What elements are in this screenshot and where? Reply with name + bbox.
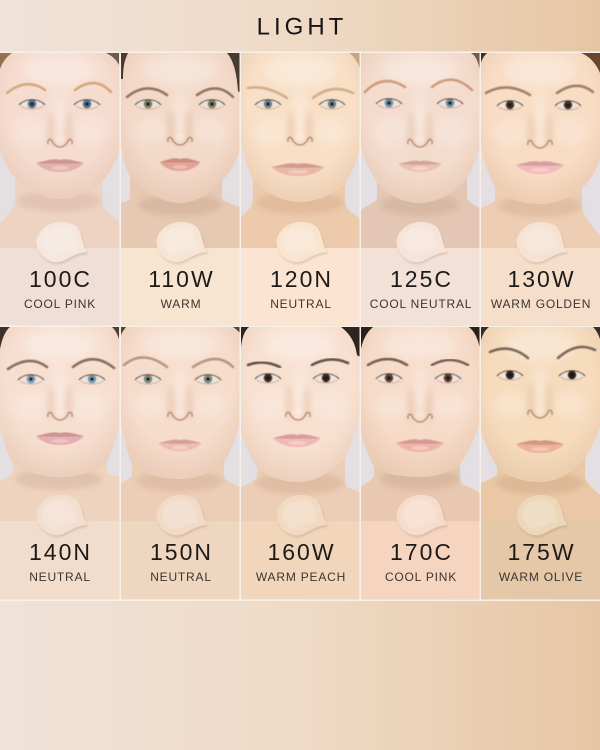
tile: 110W warm <box>119 51 242 325</box>
portrait: 120N model <box>239 51 362 249</box>
swatch: 175W <box>517 495 568 537</box>
shade code: 110W: 110W <box>148 266 215 292</box>
portrait: 175W model <box>479 325 600 523</box>
swatch: 140N <box>37 495 88 537</box>
shade code: 100C: 100C <box>29 266 92 292</box>
portrait: 125C model <box>359 51 482 249</box>
shade code: 130W: 130W <box>507 266 576 292</box>
portrait: 140N model <box>0 325 121 523</box>
swatch: 160W <box>277 495 328 537</box>
label panel: 130W <box>481 248 600 325</box>
swatch: 110W <box>157 222 208 264</box>
label panel: 110W <box>121 248 240 325</box>
shade name: warm peach: WARM PEACH <box>256 570 346 584</box>
label panel: 160W <box>241 521 360 599</box>
title: LIGHT <box>257 14 347 40</box>
swatch: 125C <box>397 222 448 264</box>
portrait: 160W model <box>239 325 362 523</box>
label panel: 120N <box>241 248 360 325</box>
shade name: cool neutral: COOL NEUTRAL <box>370 297 472 311</box>
shade name: cool pink: COOL PINK <box>385 570 457 584</box>
label panel: 100C <box>0 248 119 325</box>
portrait: 150N model <box>119 325 242 523</box>
tile: 130W warm golden <box>479 51 600 325</box>
portrait: 170C model <box>359 325 482 523</box>
shade name: neutral: NEUTRAL <box>150 570 212 584</box>
label panel: 140N <box>0 521 119 599</box>
shade code: 170C: 170C <box>390 539 453 565</box>
tile: 100C cool pink <box>0 51 121 325</box>
tile: 170C cool pink <box>359 325 482 599</box>
tile: 175W warm olive <box>479 325 600 599</box>
tile: 125C cool neutral <box>359 51 482 325</box>
tile: 120N neutral <box>239 51 362 325</box>
label panel: 150N <box>121 521 240 599</box>
shade name: warm golden: WARM GOLDEN <box>491 297 591 311</box>
swatch: 130W <box>517 222 568 264</box>
swatch: 100C <box>37 222 88 264</box>
shade name: neutral: NEUTRAL <box>270 297 332 311</box>
shade name: neutral: NEUTRAL <box>29 570 91 584</box>
shade name: cool pink: COOL PINK <box>24 297 96 311</box>
portrait: 110W model <box>119 51 242 249</box>
shade name: warm olive: WARM OLIVE <box>499 570 583 584</box>
tile: 150N neutral <box>119 325 242 599</box>
tile: 140N neutral <box>0 325 121 599</box>
shade code: 120N: 120N <box>270 266 333 292</box>
swatch: 150N <box>157 495 208 537</box>
portrait: 130W model <box>479 51 600 249</box>
swatch: 120N <box>277 222 328 264</box>
shade name: warm: WARM <box>161 297 201 311</box>
shade code: 175W: 175W <box>507 539 576 565</box>
label panel: 175W <box>481 521 600 599</box>
portrait: 100C model <box>0 51 121 249</box>
shade code: 160W: 160W <box>267 539 336 565</box>
shade code: 140N: 140N <box>29 539 92 565</box>
tile: 160W warm peach <box>239 325 362 599</box>
shade code: 125C: 125C <box>390 266 453 292</box>
label panel: 125C <box>361 248 480 325</box>
label panel: 170C <box>361 521 480 599</box>
shade code: 150N: 150N <box>150 539 213 565</box>
swatch: 170C <box>397 495 448 537</box>
